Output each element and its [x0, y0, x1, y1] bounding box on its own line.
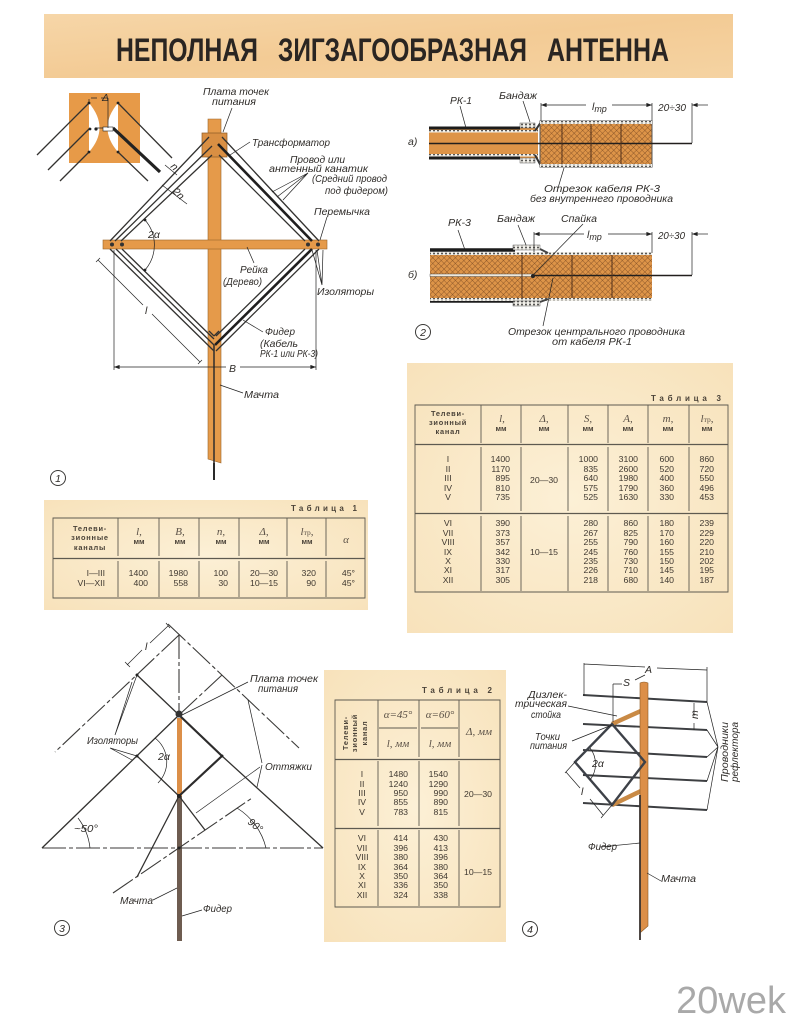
table 1 header: α: [343, 534, 349, 546]
table 3 rows: 1980: [619, 473, 638, 483]
dimension lines and leaders: [78, 623, 266, 916]
table 3 rows: 1400: [491, 454, 510, 464]
table 2 rows: 414: [394, 833, 408, 843]
labels: diagram 1: Трансформатор: [252, 137, 330, 149]
table 1 rows: 400: [134, 578, 148, 588]
table 3 rows: III: [444, 473, 452, 483]
table 1 header: зионные: [71, 533, 109, 542]
table 3 rows: 1170: [491, 464, 510, 474]
labels: diagram 3: 2α: [157, 751, 171, 763]
table 3 rows: 155: [660, 547, 674, 557]
reflector rods: [583, 695, 707, 810]
table 3 rows: IV: [444, 483, 452, 493]
labels: diagram 1: Фидер: [265, 326, 295, 338]
table 3 rows: 218: [584, 575, 598, 585]
table 3 rows: 20—30: [530, 475, 558, 485]
labels: diagram 3: Изоляторы: [87, 735, 138, 747]
table 3 rows: 235: [584, 556, 598, 566]
labels: diagram 4: питания: [530, 740, 567, 752]
labels: diagram 1: питания: [212, 96, 256, 108]
mast: [208, 119, 221, 463]
figure number 1: [50, 470, 66, 486]
labels: diagram 2: l: [587, 229, 589, 241]
labels: diagram 1: под фидером): [325, 185, 388, 197]
table 3 rows: 1000: [579, 454, 598, 464]
table 2 rows: 338: [434, 890, 448, 900]
labels: diagram 1: антенный канатик: [269, 163, 369, 175]
table 3 rows: 245: [584, 547, 598, 557]
table 3 rows: 10—15: [530, 547, 558, 557]
table 3 rows: 600: [660, 454, 674, 464]
table 2 rows: VIII: [355, 852, 369, 862]
table 3 rows: 860: [624, 518, 638, 528]
table 2 rows: 380: [434, 862, 448, 872]
labels: diagram 2: [408, 90, 686, 348]
table 2 rows: 380: [394, 852, 408, 862]
panel: table 3: Таблица 3: [651, 394, 722, 403]
labels: diagram 1: РК-1 или РК-3): [260, 348, 318, 360]
table 2 rows: 20—30: [464, 789, 492, 799]
labels: diagram 2: тр: [594, 104, 607, 114]
figure number 3: [54, 920, 70, 936]
labels: diagram 2: 20÷30: [657, 102, 686, 114]
labels: diagram 1: [145, 86, 388, 401]
table 1 header: каналы: [74, 543, 106, 552]
labels: diagram 4: Проводники: [719, 722, 731, 782]
table 3 rows: 680: [624, 575, 638, 585]
labels: diagram 1: n: [168, 161, 181, 173]
table 3 rows: 317: [496, 565, 510, 575]
table 3 grid: [415, 405, 728, 592]
table 3 rows: 453: [700, 492, 714, 502]
table 1 rows: 1980: [169, 568, 188, 578]
table 3 rows: 825: [624, 528, 638, 538]
labels: diagram 4: трическая: [515, 698, 567, 710]
table 3 rows: 860: [700, 454, 714, 464]
table 1 rows: 45°: [342, 578, 355, 588]
labels: diagram 1: Изоляторы: [317, 286, 374, 298]
table 3 rows: I: [447, 454, 449, 464]
labels: diagram 1: В: [229, 363, 236, 375]
table 3 rows: 239: [700, 518, 714, 528]
labels: diagram 2: б): [408, 269, 417, 281]
table 3 rows: 496: [700, 483, 714, 493]
table 2 rows: IV: [358, 797, 366, 807]
table 3 rows: VIII: [441, 537, 455, 547]
table 2 rows: 324: [394, 890, 408, 900]
diamond radiator: [575, 724, 645, 805]
table 1 rows: I—III: [87, 568, 105, 578]
labels: diagram 4: стойка: [531, 709, 561, 721]
labels: diagram 4: l: [581, 786, 584, 798]
table 3 rows: 187: [700, 575, 714, 585]
title banner: ЗИГЗАГООБРАЗНАЯ: [278, 32, 527, 68]
labels: diagram 4: m: [689, 710, 701, 719]
table 3 rows: 730: [624, 556, 638, 566]
table 2 rows: 815: [434, 807, 448, 817]
labels: diagram 4: A: [644, 664, 652, 676]
table 1 rows: 100: [214, 568, 228, 578]
table 3 rows: 3100: [619, 454, 638, 464]
labels: diagram 1: Мачта: [244, 389, 279, 401]
table 3 header: Телеви-: [431, 409, 465, 418]
table 3 rows: 140: [660, 575, 674, 585]
table 3 rows: 280: [584, 518, 598, 528]
table 2 rows: 350: [394, 871, 408, 881]
labels: diagram 2: Спайка: [561, 213, 597, 225]
labels: diagram 3: l: [145, 641, 148, 653]
table 2 rows: II: [360, 779, 364, 789]
table 3 header: S,: [584, 413, 592, 425]
table 3 rows: 640: [584, 473, 598, 483]
table 3 rows: 180: [660, 518, 674, 528]
labels: diagram 2: РК-3: [448, 217, 471, 229]
labels: diagram 2: Отрезок центрального проводника: [508, 326, 685, 338]
labels: diagram 1: Перемычка: [314, 206, 370, 218]
table 3 header: мм: [622, 424, 634, 433]
table 3 rows: 145: [660, 565, 674, 575]
table 2 rows: 890: [434, 797, 448, 807]
table 3 rows: 735: [496, 492, 510, 502]
table 2 rows: VII: [357, 843, 367, 853]
table 1 header: мм: [301, 537, 313, 546]
title banner: [44, 14, 733, 78]
table 3 header: l,: [499, 413, 505, 425]
labels: diagram 1: Рейка: [240, 264, 268, 276]
table 2 rows: 855: [394, 797, 408, 807]
table 1 rows: [77, 568, 355, 588]
table 3 rows: 255: [584, 537, 598, 547]
table 3 rows: 357: [496, 537, 510, 547]
table 3 rows: 267: [584, 528, 598, 538]
figure number 3: 3: [59, 923, 65, 935]
table 1 rows: 10—15: [250, 578, 278, 588]
table 2 rows: 1240: [389, 779, 408, 789]
standoffs: [612, 710, 643, 805]
labels: diagram 1: l: [145, 305, 148, 317]
labels: diagram 2: без внутреннего проводника: [530, 193, 673, 205]
table 3 rows: 360: [660, 483, 674, 493]
table 2 rows: [355, 769, 492, 900]
labels: diagram 2: от кабеля РК-1: [552, 336, 632, 348]
table 2 rows: 950: [394, 788, 408, 798]
table 3 rows: 342: [496, 547, 510, 557]
table 3 header: мм: [495, 424, 507, 433]
figure number 1: 1: [55, 473, 61, 485]
dimension lines: [96, 165, 316, 370]
table 2 header: l, мм: [429, 738, 451, 750]
table 3 rows: 330: [660, 492, 674, 502]
table 2 rows: 396: [394, 843, 408, 853]
table 2 rows: X: [359, 871, 365, 881]
table 1 rows: 20—30: [250, 568, 278, 578]
table 2 rows: 336: [394, 880, 408, 890]
table 2 rows: 1480: [389, 769, 408, 779]
table 3 rows: 810: [496, 483, 510, 493]
table 2 header: α=60°: [426, 709, 455, 721]
labels: diagram 2: Бандаж: [499, 90, 538, 102]
table 1 header: B,: [175, 526, 185, 538]
table 3 rows: V: [445, 492, 451, 502]
table 1 rows: VI—XII: [77, 578, 105, 588]
table 2 header: зионный: [350, 714, 359, 752]
table 1 header: [71, 524, 349, 552]
labels: diagram 1: 2n: [169, 185, 187, 202]
table 3 rows: II: [446, 464, 450, 474]
table 1 rows: 1400: [129, 568, 148, 578]
panel: diagram 2, cable transformer: [408, 90, 708, 348]
labels: diagram 1: (Дерево): [223, 276, 262, 288]
table 1 header: мм: [258, 537, 270, 546]
labels: diagram 3: Мачта: [120, 895, 153, 907]
table 2 rows: 364: [434, 871, 448, 881]
table 3 rows: [441, 454, 714, 585]
table 1 rows: 558: [174, 578, 188, 588]
title banner: АНТЕННА: [547, 32, 669, 68]
labels: diagram 1: Провод или: [290, 154, 345, 166]
table 2 header: α=45°: [384, 709, 413, 721]
table 1 rows: 320: [302, 568, 316, 578]
table 3 rows: X: [445, 556, 451, 566]
table 1 header: n,: [217, 526, 225, 538]
table 2 rows: VI: [358, 833, 366, 843]
labels: diagram 4: рефлектора: [729, 722, 741, 783]
figure number 4: 4: [527, 924, 533, 936]
table 3 rows: 835: [584, 464, 598, 474]
figure number 2: 2: [419, 327, 426, 339]
panel: table 3: [407, 363, 733, 633]
table 3 rows: 305: [496, 575, 510, 585]
table 2 grid: [335, 700, 500, 907]
labels: diagram 4: Точки: [535, 731, 560, 743]
table 1 header: Δ,: [258, 526, 269, 538]
table 1 rows: 45°: [342, 568, 355, 578]
table 3 rows: VII: [443, 528, 453, 538]
table 2 rows: I: [361, 769, 363, 779]
labels: diagram 1: (Кабель: [260, 338, 298, 350]
table 1 header: мм: [133, 537, 145, 546]
table 1 header: мм: [174, 537, 186, 546]
labels: diagram 1: Плата точек: [203, 86, 270, 98]
table 3 rows: XI: [444, 565, 452, 575]
table 2 rows: 413: [434, 843, 448, 853]
table 3 rows: 1630: [619, 492, 638, 502]
cable b: [430, 245, 692, 306]
table 3 rows: 195: [700, 565, 714, 575]
dimension lines: [458, 101, 708, 326]
table 3 header: [429, 409, 714, 436]
table 1 header: lтр,: [301, 526, 314, 538]
table 3 rows: IX: [444, 547, 452, 557]
table 2 header: l, мм: [387, 738, 409, 750]
table 3 header: канал: [435, 427, 461, 436]
table 2 header: [341, 709, 492, 752]
table 3 rows: 226: [584, 565, 598, 575]
table 3 header: m,: [663, 413, 674, 425]
table 3 header: A,: [622, 413, 633, 425]
table 3 header: мм: [662, 424, 674, 433]
table 1 rows: 90: [306, 578, 316, 588]
table 2 header: Δ, мм: [465, 726, 492, 738]
inset: feed point detail: Δ: [101, 92, 109, 104]
table 3 header: мм: [538, 424, 550, 433]
labels: diagram 4: [515, 664, 741, 885]
antenna wires: [110, 137, 320, 480]
table 2 rows: III: [358, 788, 366, 798]
table 3 rows: 373: [496, 528, 510, 538]
table 2 rows: 783: [394, 807, 408, 817]
labels: diagram 3: Оттяжки: [265, 761, 312, 773]
table 3 rows: 160: [660, 537, 674, 547]
transformer block: [202, 133, 227, 157]
table 3 rows: XII: [443, 575, 453, 585]
labels: diagram 3: [74, 641, 319, 915]
table 3 rows: 220: [700, 537, 714, 547]
panel: table 1: [44, 500, 368, 610]
table 3 rows: 710: [624, 565, 638, 575]
labels: diagram 2: Отрезок кабеля РК-3: [544, 183, 660, 195]
table 3 header: мм: [701, 424, 713, 433]
panel: table 2: Таблица 2: [422, 686, 493, 695]
labels: diagram 2: Бандаж: [497, 213, 536, 225]
mast and feeder: [640, 682, 648, 940]
watermark: 20wek: [676, 980, 787, 1022]
mast: [177, 718, 182, 941]
table 3 rows: 400: [660, 473, 674, 483]
table 3 rows: 550: [700, 473, 714, 483]
panel: diagram 3, antenna with guys: [42, 623, 323, 941]
table 2 rows: 364: [394, 862, 408, 872]
dimension lines and leaders: [565, 663, 718, 881]
table 3 rows: 790: [624, 537, 638, 547]
table 3 rows: 760: [624, 547, 638, 557]
table 3 rows: 210: [700, 547, 714, 557]
table 2 rows: 350: [434, 880, 448, 890]
table 2 header: Телеви-: [341, 716, 350, 750]
labels: diagram 4: 2α: [591, 758, 605, 770]
table 3 header: зионный: [429, 418, 467, 427]
table 3 rows: 202: [700, 556, 714, 566]
labels: diagram 4: S: [623, 677, 630, 689]
table 2 header: канал: [360, 720, 369, 746]
labels: diagram 2: 20÷30: [657, 230, 685, 242]
table 2 rows: V: [359, 807, 365, 817]
labels: diagram 1: 2α: [147, 229, 161, 241]
table 2 rows: 1540: [429, 769, 448, 779]
labels: diagram 4: Дизлек-: [527, 689, 568, 701]
table 3 rows: 2600: [619, 464, 638, 474]
table 3 rows: 170: [660, 528, 674, 538]
labels: diagram 2: РК-1: [450, 95, 472, 107]
labels: diagram 2: а): [408, 136, 417, 148]
leader lines: [220, 108, 327, 393]
table 3 header: Δ,: [538, 413, 549, 425]
labels: diagram 2: тр: [589, 232, 602, 242]
labels: diagram 2: l: [592, 101, 594, 113]
table 3 rows: 720: [700, 464, 714, 474]
table 1 header: Телеви-: [73, 524, 107, 533]
table 3 rows: 229: [700, 528, 714, 538]
table 1 header: l,: [136, 526, 142, 538]
panel: diagram 4, antenna with reflector: [515, 663, 741, 940]
labels: diagram 3: питания: [258, 683, 298, 695]
table 3 rows: VI: [444, 518, 452, 528]
crossbar: [103, 240, 327, 249]
table 2 rows: XII: [357, 890, 367, 900]
table 1 header: мм: [215, 537, 227, 546]
figure number 2: [416, 324, 430, 340]
table 3 rows: 895: [496, 473, 510, 483]
panel: diagram 1, antenna overview: [37, 86, 388, 486]
labels: diagram 3: Фидер: [203, 903, 232, 915]
table 3 rows: 575: [584, 483, 598, 493]
table 3 rows: 525: [584, 492, 598, 502]
guy lines: [42, 624, 323, 893]
title banner: НЕПОЛНАЯ: [116, 32, 258, 68]
table 2 rows: XI: [358, 880, 366, 890]
table 3 rows: 1790: [619, 483, 638, 493]
table 3 rows: 150: [660, 556, 674, 566]
table 3 rows: 390: [496, 518, 510, 528]
cable a: [429, 121, 692, 167]
inset: feed point detail: [37, 92, 172, 181]
labels: diagram 3: Плата точек: [250, 673, 319, 685]
table 3 rows: 520: [660, 464, 674, 474]
panel: table 1: Таблица 1: [291, 504, 358, 513]
table 2 rows: 10—15: [464, 867, 492, 877]
table 2 rows: 396: [434, 852, 448, 862]
figure number 4: [522, 922, 538, 936]
table 1 rows: 30: [218, 578, 228, 588]
table 3 header: lтр,: [701, 413, 714, 425]
table 2 rows: 430: [434, 833, 448, 843]
labels: diagram 3: 90°: [245, 816, 265, 836]
labels: diagram 3: ~50°: [74, 823, 98, 835]
table 1 grid: [53, 518, 365, 598]
table 2 rows: 990: [434, 788, 448, 798]
panel: table 2: [324, 670, 506, 942]
labels: diagram 4: Мачта: [661, 873, 696, 885]
table 2 rows: 1290: [429, 779, 448, 789]
table 3 header: мм: [582, 424, 594, 433]
table 2 rows: IX: [358, 862, 366, 872]
table 3 rows: 330: [496, 556, 510, 566]
labels: diagram 1: (Средний провод: [312, 173, 387, 185]
labels: diagram 4: Фидер: [588, 841, 617, 853]
